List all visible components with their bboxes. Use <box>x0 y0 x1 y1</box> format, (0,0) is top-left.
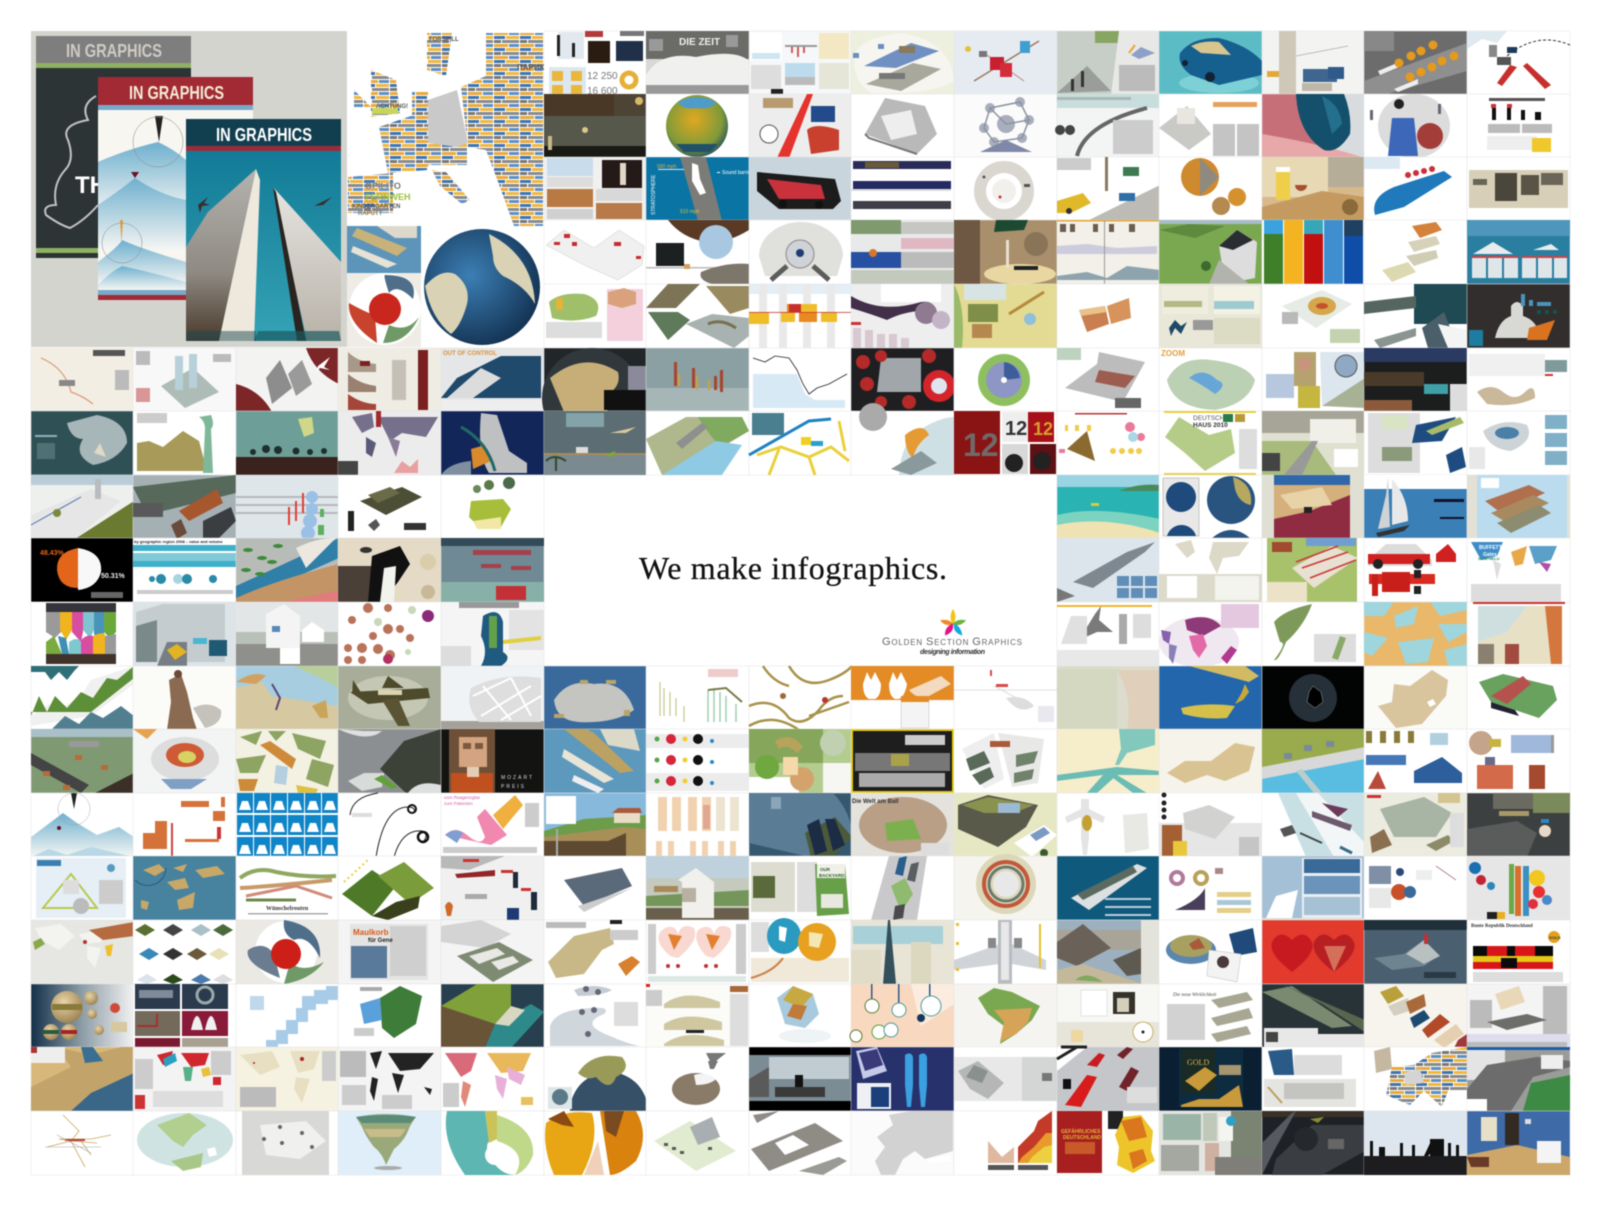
tile: stadium spread <box>1467 1047 1570 1111</box>
tile: Die Zeit building <box>646 31 749 95</box>
tile: red carpet cars <box>749 94 852 158</box>
word labels <box>352 37 545 217</box>
tile: green red relief map <box>1467 666 1570 730</box>
tile: Mediterranean map <box>236 666 339 730</box>
tile: multicolour Europe map <box>1364 1047 1467 1111</box>
tile: line chart <box>749 348 852 412</box>
tile: sphere and cube comparison <box>646 220 749 284</box>
tile: green flower chart <box>954 348 1057 412</box>
tile: orange split globe <box>544 1111 647 1175</box>
tile: pixelated Mozart: PREIS <box>501 784 526 790</box>
tile: magazine spread with portrait silhouettes <box>544 31 647 97</box>
tile: data table <box>1467 348 1570 412</box>
tile: exploded floor plan <box>1057 348 1160 412</box>
tile: Austria relief <box>1159 729 1262 793</box>
tile: teal road spread <box>1364 284 1467 348</box>
tile: dog and fly <box>338 538 441 602</box>
tile: palm spread <box>544 411 647 475</box>
tile: Gefaehrliches Deutschland: DEUTSCHLAND <box>1063 1135 1101 1141</box>
tile: red sphere logo large <box>236 920 339 984</box>
tile: Antarctica map <box>31 411 134 475</box>
tile: coloured climate bars <box>1262 220 1365 284</box>
tile: teal ship <box>1057 856 1160 920</box>
cover: grey issue: TH <box>75 172 107 199</box>
word labels: OPILITO <box>365 181 401 191</box>
word labels: KINDERGARTEN <box>352 204 400 210</box>
tile: magazine spread with portrait silhouettes: 12 250 <box>587 71 618 82</box>
tile: yellow nature spread <box>954 284 1057 348</box>
tile: black grey yellow-bordered <box>851 729 954 793</box>
tile: city with trees <box>31 475 134 539</box>
tile: chart collection <box>749 31 852 95</box>
tile: mountains with dials <box>31 793 134 857</box>
tile: blue sailing boat <box>1364 475 1467 539</box>
tile: Gefaehrliches Deutschland: GEFÄHRLICHES <box>1061 1128 1101 1135</box>
tile: Die Zeit building: DIE ZEIT <box>679 37 720 48</box>
tile: desert and body spread <box>544 157 647 221</box>
tile: world dot maps <box>1159 538 1262 602</box>
tile: red train snow <box>441 856 544 920</box>
tile: purple swirl chart <box>851 284 954 348</box>
tile: warship diagram <box>1057 538 1160 602</box>
tile: magazine spread with portrait silhouettes: 16 600 <box>587 86 618 97</box>
tile: Deutsches Haus map: DEUTSCHES <box>1193 415 1234 422</box>
tile: colour ribbons <box>31 602 134 666</box>
tile: football players with crest <box>851 348 955 412</box>
tile: yellow and blue networks <box>749 411 852 475</box>
tile: heart shaped world <box>646 920 749 984</box>
tile: Buffett Gates world: Gates <box>1483 552 1497 558</box>
tile: orange and white brain: 48.43% <box>40 550 65 557</box>
tile: teal circle chart <box>441 1111 544 1175</box>
tile: Gold data: GOLD <box>1187 1058 1209 1067</box>
tile: black silhouette workers <box>1364 1111 1467 1175</box>
tile: height comparison with statue <box>133 411 236 475</box>
tile: dot rows <box>646 729 749 793</box>
tile: Buffett Gates world: BUFFETT <box>1479 545 1502 551</box>
tile: blue yacht magazine <box>1467 220 1570 284</box>
tile: tank <box>338 475 441 539</box>
panel: central headline <box>639 550 1022 656</box>
tile: green stalks <box>646 666 749 730</box>
tile: olive geology patches <box>236 729 339 793</box>
tile: purple world map <box>338 411 441 475</box>
tile: black polar disc <box>1262 666 1365 730</box>
tile: night city view <box>1364 348 1467 412</box>
tile: bacteria on tan layers <box>236 538 339 602</box>
tile: Berlin route map <box>31 348 134 412</box>
tile: orange teal maps <box>1364 602 1467 666</box>
tile: red yellow mountain chart <box>954 1111 1057 1175</box>
tile: teal bar landscape <box>646 348 749 412</box>
tile: Brazil <box>954 984 1057 1048</box>
tile: blue room <box>1467 1111 1570 1175</box>
tile: photo collage <box>1159 1111 1262 1175</box>
tile: orange crater stadium <box>133 729 236 793</box>
tile: Bunte Republik chart: GOLD <box>1549 935 1561 940</box>
tile: layered ferry <box>1467 475 1570 539</box>
tile: photo collage <box>851 220 954 284</box>
tile: sound barrier diagram: Sound barrier <box>722 170 753 176</box>
tile: blue island plan <box>544 666 647 730</box>
tile: Wünschelrouten stripes: Wünschelrouten <box>266 906 309 912</box>
logo: Golden Section Graphics: GOLDEN SECTION GRAPHICS <box>882 636 1022 648</box>
tile: Burj tower <box>851 920 954 984</box>
tile: orange and green farm section <box>1262 538 1365 602</box>
tile: green town above blue <box>1262 729 1365 793</box>
tile: teal river delta <box>1057 729 1160 793</box>
tile: stacked iso sections <box>954 729 1057 793</box>
tile: beer and wood table <box>1262 157 1365 221</box>
tile: sand funnel <box>646 1047 749 1111</box>
tile: blue green shaft figure <box>441 602 544 666</box>
tile: plane section <box>954 920 1057 984</box>
tile: white tower complex <box>133 348 236 412</box>
tile: oil pump on blue <box>1262 856 1365 920</box>
tile: Maulkorb fuer Gene magazine <box>338 920 441 984</box>
tile: black coach with red seats <box>749 157 852 221</box>
title: We make infographics. <box>639 550 947 586</box>
tile: red racing cars <box>1057 1047 1160 1111</box>
tile: Europe grey map <box>851 1111 954 1175</box>
tile: world with red russia <box>31 920 134 984</box>
tile: Bunte Republik chart: Bunte Republik Deutschland <box>1471 924 1533 929</box>
tile: pale energy triangle <box>31 856 134 920</box>
tile: open book and icons <box>1159 792 1262 857</box>
cover: red issue: IN GRAPHICS <box>129 83 224 103</box>
tile: pale oval world <box>133 1111 236 1175</box>
tile: blue atlas islands <box>133 856 236 920</box>
tile: Maulkorb fuer Gene magazine: Maulkorb <box>353 928 389 937</box>
tile: Red Sea relief <box>31 1047 134 1111</box>
tile: tan earth at night <box>542 348 647 448</box>
tile: road with cars <box>851 856 954 920</box>
tile: text and isometric blocks: Die neue Wirklichkeit <box>1172 993 1217 998</box>
tile: Wünschelrouten stripes <box>236 856 339 920</box>
tile: red bars and blue spheres <box>236 475 339 540</box>
tile: green island <box>1262 602 1365 666</box>
tile: running shoe <box>441 411 544 475</box>
tile: kimono figure <box>1364 94 1467 158</box>
cover: twin towers issue: IN GRAPHICS <box>216 125 312 145</box>
tile: sound barrier diagram: STRATOSPHERE <box>651 174 657 215</box>
tile: statistics with spheres <box>1364 856 1467 920</box>
tile: Swiss relief <box>236 1111 339 1175</box>
tile: cross section with red <box>1262 475 1365 539</box>
tile: pink yellow snake: vom Reagenzglas <box>444 795 481 800</box>
tile: resort plan <box>1159 348 1262 412</box>
tile: Deutsches Haus map <box>1159 411 1262 475</box>
word labels: ПАРИК <box>517 63 545 72</box>
tile: orange stair charts <box>133 793 236 857</box>
tile: Afghanistan map <box>544 920 647 984</box>
tile: Germany with trees <box>441 475 544 539</box>
tile: blue heart on pink <box>1262 94 1365 158</box>
tile: dark car interior <box>1262 1111 1365 1175</box>
tile: mechanical diagrams <box>1467 729 1570 793</box>
tile: newspaper with plane <box>1467 984 1570 1048</box>
tile: resort plan: ZOOM <box>1161 349 1185 358</box>
tile: black world map <box>338 1047 441 1111</box>
tile: triangle chart with pink and yellow <box>1057 411 1160 475</box>
tile: Our Backyard magazine: OUR <box>820 867 831 872</box>
tile: plans and building <box>1262 1047 1365 1111</box>
tile: green teal peaks <box>31 666 134 730</box>
tile: black cube spread <box>1057 984 1160 1048</box>
tile: pink world <box>441 1047 544 1111</box>
tile: magazine layouts <box>1364 411 1467 475</box>
tile: black figures and yellow chart <box>1467 94 1570 158</box>
tile: landforms spread <box>646 984 749 1048</box>
tile: Atlantic globe <box>421 226 543 347</box>
tile: purple world <box>1159 602 1262 667</box>
tile: twister on pale blue <box>338 1111 441 1175</box>
tile: green town <box>31 729 134 793</box>
tile: sailing ships <box>347 226 421 273</box>
tile: planets tan <box>31 984 134 1048</box>
tile: ships on blue sea <box>544 729 647 793</box>
tile: red hearts <box>1262 920 1365 984</box>
tile: olive airplane <box>338 666 441 730</box>
tile: trains on map <box>1467 31 1570 95</box>
word labels: RAPUTT <box>358 211 383 217</box>
tile: river terrain block <box>646 411 749 475</box>
cover: grey issue <box>36 36 191 258</box>
tile: magazine pile <box>1262 348 1365 412</box>
tile: faint sketch map <box>954 666 1057 730</box>
tile: blue signs grid <box>236 793 339 857</box>
tile: floor plan <box>851 94 954 158</box>
tile: crowd with van <box>338 729 441 793</box>
tile: icon tile loop <box>133 920 236 984</box>
tile: South Africa map <box>1364 666 1467 730</box>
word labels: ACHTUNG! <box>376 104 408 110</box>
tile: blue bobsled <box>1364 157 1467 221</box>
tile: stadium site plan <box>1262 284 1365 348</box>
logo: Golden Section Graphics: designing information <box>920 649 985 656</box>
tile: sound barrier diagram: 510 mph <box>680 209 700 215</box>
tile: Our Backyard magazine <box>749 856 852 920</box>
tile: 12 anniversary numbers: 12 <box>963 427 999 463</box>
tile: pink yellow snake: zum Patienten <box>444 801 473 806</box>
tile: solar panel <box>544 856 647 920</box>
tile: four relief maps <box>646 284 749 348</box>
tile: yellow green globe <box>646 94 749 158</box>
tile: dark roads <box>1262 984 1365 1048</box>
tile: balloons of the world <box>749 918 852 984</box>
tile: pink yellow snake <box>441 793 544 857</box>
tile: aerial red island <box>441 538 544 602</box>
tile: terrain block <box>441 984 544 1048</box>
tile: green farm house <box>1159 220 1262 284</box>
icon: five-petal star <box>942 611 964 634</box>
tile: towers with planes <box>236 348 339 412</box>
tile: blue engineering diagrams <box>1364 729 1467 793</box>
tile: silver car <box>954 1047 1057 1111</box>
tile: green and pink spread <box>544 284 647 348</box>
tile: orange bars chart <box>749 284 852 348</box>
tile: peach circles map <box>850 984 954 1048</box>
logo: Golden Section Graphics <box>882 611 1022 656</box>
tile: ice cubes staircase <box>236 984 339 1048</box>
tile: Italy on blue sea <box>1159 666 1262 730</box>
tile: Bunte Republik chart <box>1467 920 1570 984</box>
tile: green cube <box>338 984 441 1048</box>
tile: pirate figure <box>133 666 236 730</box>
tile: dark sea ship <box>1364 920 1467 984</box>
tile: house collage <box>1262 411 1365 475</box>
tile: green lamp on table <box>954 220 1057 284</box>
tile: orange and white brain <box>31 538 134 602</box>
tile: green plan with circles <box>749 729 852 793</box>
tile: Deutsches Haus map: HAUS 2010 <box>1193 422 1228 429</box>
tile: Buffett Gates world: SLIM HELU <box>1478 556 1500 561</box>
tile: 12 anniversary numbers: 12 <box>1005 418 1027 440</box>
tile: portrait timeline charts <box>1057 220 1160 284</box>
tile: exploded orange building <box>1364 220 1467 284</box>
tile: cutaway house grey <box>236 602 339 666</box>
tile: orange signs on road <box>1364 31 1467 95</box>
tile: iso building plan <box>646 1111 749 1175</box>
tile: Atomium <box>954 94 1057 158</box>
tile: red sphere logo <box>347 273 421 347</box>
tile: blue skeletons <box>851 1047 954 1111</box>
tile: nest stadium <box>441 666 544 730</box>
tile: colourful bubbles <box>1467 856 1570 920</box>
tile: pixelated Mozart <box>441 729 544 793</box>
panel: In Graphics magazine covers <box>31 31 347 347</box>
tile: bicycle spiral <box>544 984 647 1048</box>
tile: candles and bulb photos <box>544 94 647 158</box>
tile: Maulkorb fuer Gene magazine: für Gene <box>368 938 393 944</box>
tile: blue car <box>1159 31 1262 95</box>
cover: red issue <box>98 77 253 300</box>
tile: orange and white brain: 50.31% <box>101 573 126 580</box>
tile: floating boats plan <box>851 31 954 95</box>
tile: dark living room <box>1467 793 1570 857</box>
tile: football stadium <box>851 793 954 857</box>
tile: red and blue plant diagram <box>954 31 1057 95</box>
tile: black spirals <box>338 793 441 857</box>
tile: shop aisles <box>133 475 236 539</box>
tile: underground building section <box>954 793 1057 857</box>
tile: football stadium: Die Welt am Ball <box>852 799 899 805</box>
tile: Out of control harbour <box>441 348 544 412</box>
tile: polyhedron globe <box>749 984 852 1048</box>
tile: Gefaehrliches Deutschland <box>1057 1111 1160 1175</box>
tile: red Formula 1 cars <box>1364 538 1467 602</box>
tile: sound barrier diagram: 580 mph <box>657 164 677 170</box>
tile: dish and fire <box>851 403 954 475</box>
tile: interior spread <box>1057 31 1160 95</box>
tile: building with article <box>1159 94 1262 158</box>
cover: twin towers issue <box>186 119 341 341</box>
word labels: FORSPILL <box>429 37 459 43</box>
tile: donut charts <box>1159 856 1262 920</box>
tile: text and isometric blocks <box>1159 984 1262 1048</box>
tile: teal data table <box>133 538 236 602</box>
tile: green terrain cubes <box>338 856 441 920</box>
tile: container ship on teal <box>1262 793 1365 857</box>
tile: dark silhouette slide <box>1467 284 1570 348</box>
tile: bridge on coast <box>1055 94 1160 158</box>
tile: supermarket yellow section <box>133 602 236 666</box>
tile: house on grass <box>646 856 749 920</box>
tile: beige trade world <box>236 1047 339 1111</box>
tile: Our Backyard magazine: BACKYARD <box>819 873 845 878</box>
tile: pixelated Mozart: MOZART <box>501 775 534 781</box>
cover: grey issue: IN GRAPHICS <box>66 41 162 61</box>
tile: teal trees and roots <box>236 411 339 475</box>
tile: circular machine plan <box>749 220 852 284</box>
tile: iso palace <box>441 920 544 984</box>
tile: well section with house <box>544 793 647 857</box>
tile: construction vehicles <box>1057 157 1160 221</box>
tile: office interior <box>749 1047 852 1111</box>
tile: circle network <box>338 602 441 666</box>
tile: beige panels <box>1159 284 1262 348</box>
tile: plane on map document <box>1057 602 1160 666</box>
tile: turquoise beach <box>1057 475 1160 539</box>
tile: blue-pooled stadium <box>1467 411 1570 475</box>
tile: town corner <box>1057 920 1160 984</box>
tile: teal data table: by geographic region 2008 – value and volume <box>134 539 223 544</box>
tile: floor plans grey <box>749 1111 852 1175</box>
tile: beige town map <box>1364 793 1467 857</box>
tile: Gold data <box>1159 1047 1262 1111</box>
tile: Out of control harbour: OUT OF CONTROL <box>443 351 497 357</box>
word labels: FERNWEH <box>365 192 410 202</box>
tile: bowl with cards <box>1159 920 1262 984</box>
tile: transit network <box>31 1111 134 1175</box>
tile: red layer charts <box>338 348 441 412</box>
tile: anatomical bodies <box>646 793 749 857</box>
tile: blue globes <box>1159 475 1262 539</box>
tile: red ring chart <box>954 854 1057 920</box>
tile: brown chains <box>749 666 852 730</box>
tile: grey circular diagram <box>954 157 1057 221</box>
tile: 12 anniversary numbers: 12 <box>1033 419 1053 439</box>
panel: word map of Europe <box>347 31 545 226</box>
tile: cream vehicles <box>1364 984 1467 1048</box>
tile: pale green map <box>1057 666 1160 730</box>
tile: map with red spots <box>544 220 647 284</box>
tile: wind turbine cutaway <box>1262 31 1365 95</box>
tile: sound barrier diagram <box>646 157 753 221</box>
tile: red world map spread <box>133 1047 236 1111</box>
tile: navy bands <box>851 157 954 221</box>
tile: orange spheres <box>1159 157 1262 221</box>
tile: tunnel blue trucks <box>749 793 852 857</box>
tile: Buffett Gates world <box>1467 538 1570 602</box>
tile: Asia globe <box>544 1047 648 1111</box>
tile: navy and maroon data <box>133 984 236 1048</box>
tile: 12 anniversary numbers <box>954 411 1057 475</box>
tile: skin cubes <box>1057 284 1160 348</box>
tile: human organs <box>1057 793 1160 857</box>
tile: city grid model <box>1467 157 1570 221</box>
tile: orange edged map <box>1467 602 1570 666</box>
tile: orange hands <box>851 666 954 730</box>
